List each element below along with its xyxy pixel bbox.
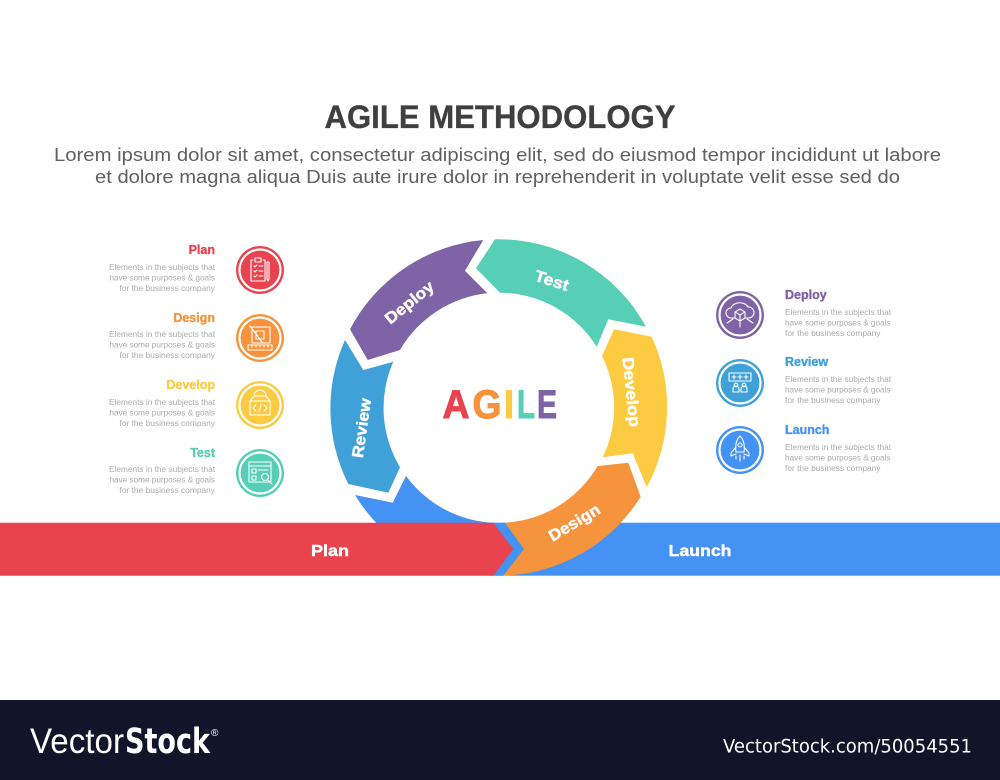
launch band [490,523,1000,576]
segment: develop: Develop [618,356,643,428]
footer logo: Stock [125,722,211,762]
item: develop text: Develop [166,378,215,392]
segment: test: Test [532,268,572,295]
icon: launch rocket [716,426,764,474]
center label AGILE: A [442,383,470,427]
item: launch text: Elements in the subjects that [785,442,892,452]
plan arrow band [0,523,513,576]
item: deploy text: for the business company [785,328,881,338]
item: launch text [785,423,892,473]
item: deploy text: have some purposes & goals [785,318,890,328]
item: review text [785,355,892,405]
item: design text: have some purposes & goals [110,340,215,350]
icon: deploy cloud [716,291,764,339]
center label AGILE [442,383,557,427]
center label AGILE: L [517,383,535,427]
item: deploy text: Elements in the subjects that [785,307,892,317]
item: plan text: Elements in the subjects that [109,262,216,272]
item: develop text: Elements in the subjects that [109,397,216,407]
item: test text: Test [190,446,216,460]
item: develop text: have some purposes & goals [110,408,215,418]
title: AGILE METHODOLOGY [324,99,676,135]
item: test text: have some purposes & goals [110,474,215,484]
item: review text: for the business company [785,395,881,405]
segment: design [503,463,641,576]
center label AGILE: E [537,383,557,427]
item: review text: Elements in the subjects that [785,374,892,384]
footer id: VectorStock.com/50054551 [723,736,972,758]
launch band: Launch [668,543,732,560]
item: design text: Elements in the subjects that [109,329,216,339]
item: test text [109,446,216,495]
item: test text: Elements in the subjects that [109,464,216,474]
item: review text: have some purposes & goals [785,384,890,394]
item: deploy text [785,288,892,338]
icon: review stars [716,359,764,407]
item: plan text: for the business company [120,283,216,293]
item: test text: for the business company [120,485,216,495]
subtitle text: Lorem ipsum dolor sit amet, consectetur adipiscing elit, sed do eiusmod tempor incididunt ut labore [54,144,941,165]
subtitle text: et dolore magna aliqua Duis aute irure dolor in reprehenderit in voluptate velit esse sed do [95,166,900,187]
item: design text [109,311,216,360]
item: launch text: for the business company [785,463,881,473]
subtitle text [54,144,941,187]
segment: launch arc [355,476,505,576]
item: launch text: Launch [785,423,829,437]
segment: review [330,340,400,493]
icon: develop code [236,381,284,429]
item: plan text: Plan [189,243,215,257]
segment: develop [602,329,667,487]
footer logo: ® [211,728,219,739]
footer logo [30,722,219,762]
segment: deploy: Deploy [382,278,438,328]
item: plan text: have some purposes & goals [110,272,215,282]
item: review text: Review [785,355,828,369]
icon: test browser [236,449,284,497]
segment: design: Design [546,501,604,545]
item: design text: for the business company [120,350,216,360]
center label AGILE: G [472,383,502,427]
item: develop text: for the business company [120,418,216,428]
footer logo: Vector [30,722,124,761]
item: deploy text: Deploy [785,288,827,302]
center label AGILE: I [504,383,514,427]
icon: design ruler [236,314,284,362]
footer bar [0,700,1000,780]
segment: test [476,239,646,347]
icon: plan clipboard [236,246,284,294]
segment: deploy [350,240,487,360]
item: plan text [109,243,216,293]
segment: review: Review [350,397,375,459]
item: design text: Design [173,311,215,325]
plan arrow band: Plan [311,543,349,560]
item: develop text [109,378,216,428]
item: launch text: have some purposes & goals [785,452,890,462]
